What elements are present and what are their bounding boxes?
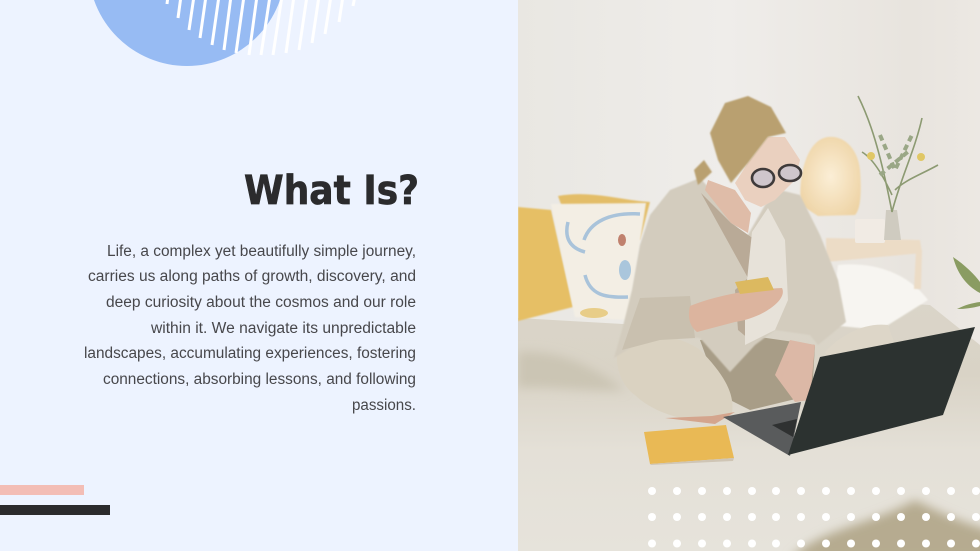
yellow pillow <box>518 207 573 321</box>
body text: connections, absorbing lessons, and following <box>103 371 416 388</box>
bed shadow folds <box>518 352 625 390</box>
title: What Is? <box>244 168 419 214</box>
decorative white stripes <box>167 0 355 55</box>
neck and face <box>705 137 800 233</box>
bedroom wall <box>518 0 980 345</box>
notebook <box>644 425 734 465</box>
arm and hand <box>689 288 783 332</box>
body text: landscapes, accumulating experiences, fostering <box>84 345 416 362</box>
bedside table <box>826 238 922 289</box>
plant flowers <box>867 152 925 161</box>
patterned white pillow <box>551 203 646 320</box>
plant stems and leaves <box>858 96 938 212</box>
back pillow <box>558 194 650 240</box>
left panel background <box>0 0 518 551</box>
bed sheet <box>518 300 980 551</box>
corner plant <box>953 257 980 309</box>
body text <box>84 243 416 414</box>
laptop <box>723 327 975 456</box>
phone <box>735 277 774 294</box>
photo: woman working on a laptop on a bed <box>518 0 980 551</box>
body text: passions. <box>352 397 416 414</box>
pink accent bar <box>0 485 84 495</box>
hair <box>694 96 786 185</box>
white dot grid <box>648 487 980 548</box>
body text: carries us along paths of growth, discovery, and <box>88 268 416 285</box>
body text: deep curiosity about the cosmos and our role <box>106 294 416 311</box>
plant vase <box>884 210 901 240</box>
candle <box>855 238 885 243</box>
seated legs <box>617 325 895 424</box>
body text: within it. We navigate its unpredictable <box>150 320 416 337</box>
glasses <box>752 165 801 187</box>
cardigan <box>614 178 846 372</box>
decorative blue circle <box>88 0 286 66</box>
right hand on keyboard <box>775 340 815 402</box>
white pillow behind <box>830 264 928 330</box>
lamp <box>800 137 861 216</box>
dark accent bar <box>0 505 110 515</box>
body text: Life, a complex yet beautifully simple journey, <box>107 243 416 260</box>
